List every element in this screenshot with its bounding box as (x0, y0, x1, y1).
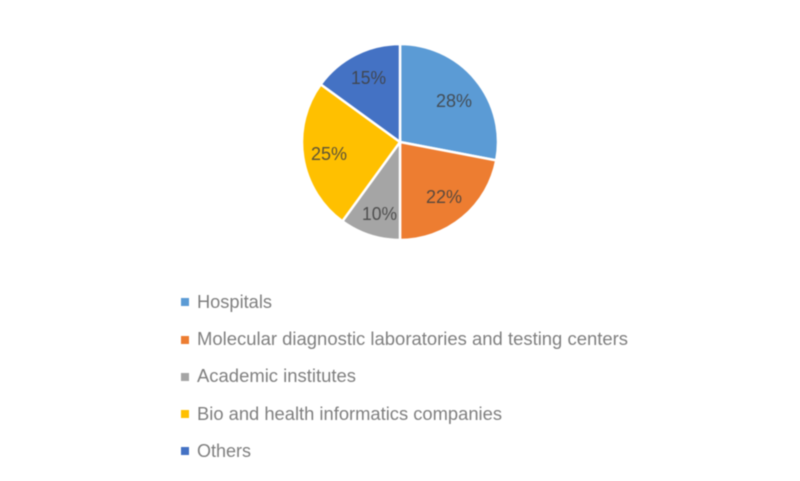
pie labels (311, 68, 472, 224)
legend item: Others: Others (197, 440, 251, 461)
legend item: Bio and health informatics companies: Bio and health informatics companies (197, 403, 502, 424)
legend item: Academic institutes: Academic institutes (197, 365, 356, 386)
slice: Bio and health informatics 25% (302, 84, 400, 221)
label 15%: 15% (351, 68, 386, 88)
label 22%: 22% (426, 187, 462, 207)
label 10%: 10% (362, 204, 397, 224)
slice: Academic institutes 10% (342, 142, 400, 240)
legend (181, 291, 628, 461)
slice: Molecular diagnostic laboratories 22% (400, 142, 496, 240)
pie chart (302, 44, 498, 240)
slice: Hospitals 28% (400, 44, 498, 160)
label 28%: 28% (436, 91, 472, 111)
label 25%: 25% (311, 144, 347, 164)
legend item: Hospitals: Hospitals (197, 291, 272, 312)
legend item: Molecular diagnostic laboratories and testing centers: Molecular diagnostic laboratories and testing centers (197, 328, 628, 349)
slice: Others 15% (321, 44, 400, 142)
